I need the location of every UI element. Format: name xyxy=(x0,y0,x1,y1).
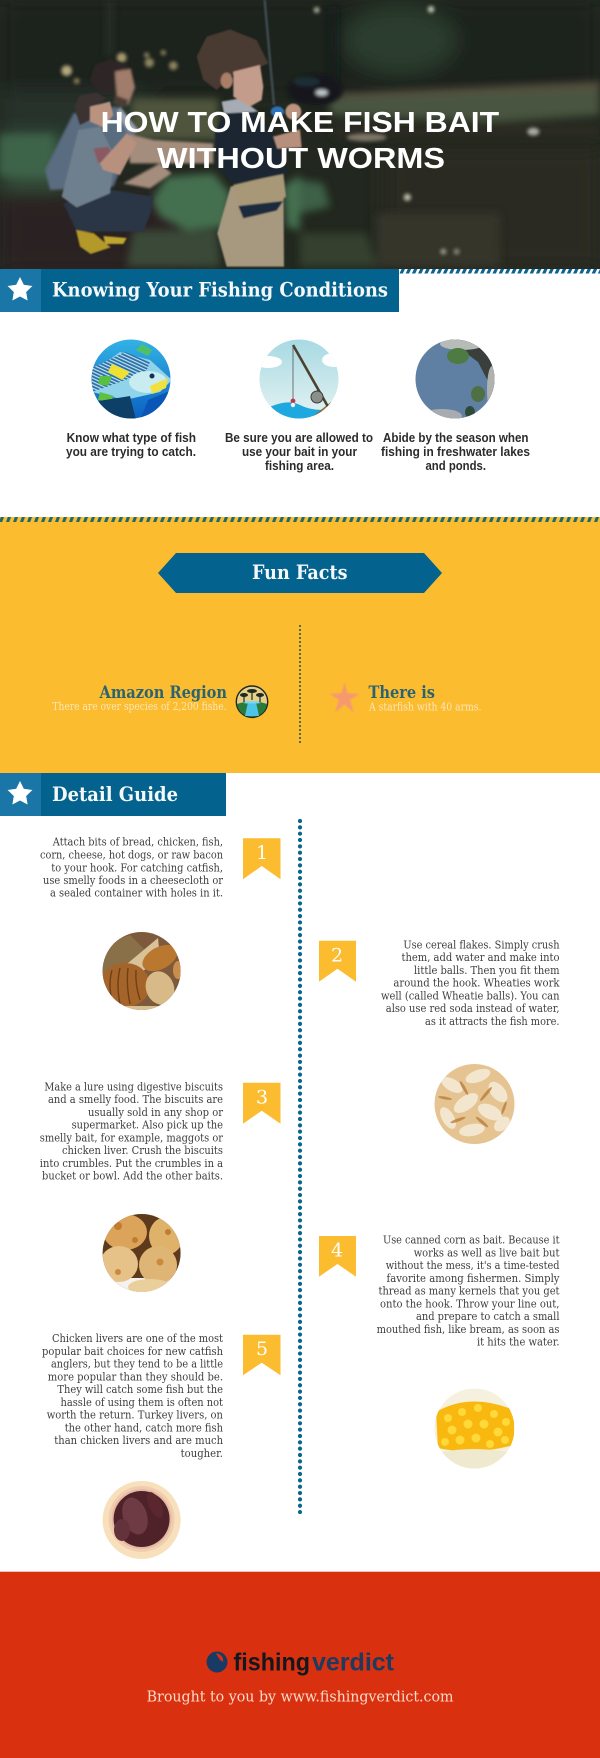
text: step 3 xyxy=(40,1080,224,1182)
ribbon: number 2 xyxy=(319,941,356,982)
text: step 2: little balls. Then you fit them xyxy=(414,964,560,977)
text: step 3: smelly bait, for example, maggots or xyxy=(40,1131,224,1144)
icon: Amazon landscape badge xyxy=(236,686,268,717)
caption: allowed bait: use your bait in your xyxy=(242,444,357,459)
step 5 xyxy=(42,1332,280,1560)
text: step 3: Make a lure using digestive biscuits xyxy=(44,1080,223,1093)
ribbon: number 4 xyxy=(319,1236,356,1277)
fact: starfish: There is xyxy=(368,683,435,702)
ribbon: number 1 xyxy=(243,838,280,879)
text: step 3: supermarket. Also pick up the xyxy=(72,1119,223,1132)
text: step 1: to your hook. For catching catfish, xyxy=(51,861,223,874)
icon: pond water xyxy=(416,340,494,418)
ribbon: number 1: 1 xyxy=(256,842,268,864)
caption: season: and ponds. xyxy=(426,458,486,473)
hero photo: family fishing by a pond xyxy=(0,0,600,273)
text: step 5: popular bait choices for new catfish xyxy=(42,1345,223,1358)
text: step 2: them, add water and make into xyxy=(402,951,560,964)
panel: footer xyxy=(0,1572,600,1758)
step 1 xyxy=(40,836,280,1014)
boy xyxy=(197,0,302,267)
caption: know your fish xyxy=(66,430,196,459)
text: step 4: thread as many kernels that you get xyxy=(378,1285,560,1298)
logo: fishingverdict: verdict xyxy=(312,1649,395,1677)
text: step 4: works as well as live bait but xyxy=(414,1246,560,1259)
image: biscuits xyxy=(102,1214,181,1292)
text: step 5: tougher. xyxy=(181,1447,223,1460)
caption: season: Abide by the season when xyxy=(383,430,529,445)
text: step 4: onto the hook. Throw your line out, xyxy=(380,1298,560,1310)
caption: season xyxy=(381,430,530,473)
text: step 3: chicken liver. Crush the biscuits xyxy=(62,1144,223,1157)
text: step 3: bucket or bowl. Add the other baits. xyxy=(42,1170,223,1182)
ribbon: number 5: 5 xyxy=(256,1338,268,1360)
heading: Fun Facts xyxy=(158,553,442,593)
caption: know your fish: Know what type of fish xyxy=(67,430,196,445)
text: step 5: They will catch some fish but the xyxy=(57,1383,223,1396)
text: step 3: usually sold in any shop or xyxy=(88,1106,224,1119)
text: step 1: a sealed container with holes in it. xyxy=(50,887,223,900)
text: step 2: well (called Wheatie balls). You can xyxy=(381,989,560,1002)
fact: Amazon Region: Amazon Region xyxy=(99,683,227,702)
text: step 5: more popular than they should be. xyxy=(48,1370,223,1383)
text: step 5: the other hand, catch more fish xyxy=(65,1421,223,1434)
image: cereal flakes xyxy=(434,1063,516,1145)
man xyxy=(45,59,213,190)
logo: fishingverdict xyxy=(206,1649,395,1677)
text: step 2: as it attracts the fish more. xyxy=(425,1015,560,1028)
text: step 4: it hits the water. xyxy=(477,1336,560,1349)
image: bread xyxy=(102,932,181,1010)
text: step 2: also use red soda instead of water, xyxy=(386,1002,560,1015)
caption: allowed bait: Be sure you are allowed to xyxy=(225,430,373,445)
icon: fishing rod xyxy=(260,340,338,418)
fact: Amazon Region: There are over species of 2,200 fishe. xyxy=(52,700,227,713)
footer credit: Brought to you by www.fishingverdict.com xyxy=(147,1689,454,1706)
fact: starfish: A starfish with 40 arms. xyxy=(368,701,482,714)
icon: tropical fish xyxy=(90,338,172,420)
title: WITHOUT WORMS xyxy=(157,143,445,175)
logo: fishingverdict: fishing xyxy=(234,1649,310,1677)
step 3 xyxy=(40,1080,280,1295)
caption: know your fish: you are trying to catch. xyxy=(66,444,196,459)
text: step 1 xyxy=(40,836,224,900)
text: step 2 xyxy=(381,938,560,1028)
title xyxy=(101,107,500,175)
fact: Amazon Region xyxy=(52,683,227,713)
text: step 5: Chicken livers are one of the most xyxy=(52,1332,223,1345)
text: step 2: around the hook. Wheaties work xyxy=(393,977,560,990)
stripe divider under hero xyxy=(399,269,600,274)
text: step 1: corn, cheese, hot dogs, or raw bacon xyxy=(40,848,223,861)
text: step 3: into crumbles. Put the crumbles in a xyxy=(40,1157,223,1170)
caption: allowed bait: fishing area. xyxy=(265,458,334,473)
caption: allowed bait xyxy=(225,430,373,473)
step 4 xyxy=(319,1234,560,1470)
text: step 4: and prepare to catch a small xyxy=(416,1310,560,1323)
ribbon: number 2: 2 xyxy=(331,945,343,967)
text: step 4 xyxy=(377,1234,560,1349)
ribbon: number 3 xyxy=(243,1083,280,1124)
text: step 4: favorite among fishermen. Simply xyxy=(386,1272,560,1285)
section banner: Knowing Your Fishing Conditions: Knowing Your Fishing Conditions xyxy=(52,278,388,302)
title: HOW TO MAKE FISH BAIT xyxy=(101,107,500,139)
text: step 5: hassle of using them is often not xyxy=(60,1396,223,1409)
fact: starfish xyxy=(368,683,482,714)
caption: season: fishing in freshwater lakes xyxy=(381,444,530,459)
icon: starfish xyxy=(330,682,360,712)
section banner: Detail Guide xyxy=(0,773,226,816)
text: step 5 xyxy=(42,1332,223,1460)
step 2 xyxy=(319,938,560,1145)
ribbon: number 4: 4 xyxy=(331,1240,343,1262)
section banner: Knowing Your Fishing Conditions xyxy=(0,269,399,312)
text: step 1: Attach bits of bread, chicken, fish, xyxy=(52,836,223,849)
section banner: Detail Guide: Detail Guide xyxy=(52,782,178,806)
text: step 1: use smelly foods in a cheesecloth or xyxy=(43,874,224,887)
image: chicken liver xyxy=(100,1480,184,1560)
text: step 4: mouthed fish, like bream, as soon as xyxy=(377,1323,560,1336)
ribbon: number 3: 3 xyxy=(256,1086,268,1108)
image: canned corn xyxy=(434,1388,516,1470)
heading: Fun Facts: Fun Facts xyxy=(252,560,348,584)
text: step 5: anglers, but they tend to be a little xyxy=(51,1358,223,1370)
text: step 4: Use canned corn as bait. Because it xyxy=(383,1234,560,1247)
text: step 4: without the mess, it's a time-tested xyxy=(386,1259,560,1272)
text: step 3: and a smelly food. The biscuits are xyxy=(48,1093,223,1106)
kid xyxy=(62,93,153,254)
text: step 5: than chicken livers and are much xyxy=(54,1434,223,1447)
text: step 2: Use cereal flakes. Simply crush xyxy=(403,938,560,951)
ribbon: number 5 xyxy=(243,1335,280,1375)
text: step 5: worth the return. Turkey livers, on xyxy=(47,1408,223,1422)
panel: fun facts xyxy=(0,517,600,773)
